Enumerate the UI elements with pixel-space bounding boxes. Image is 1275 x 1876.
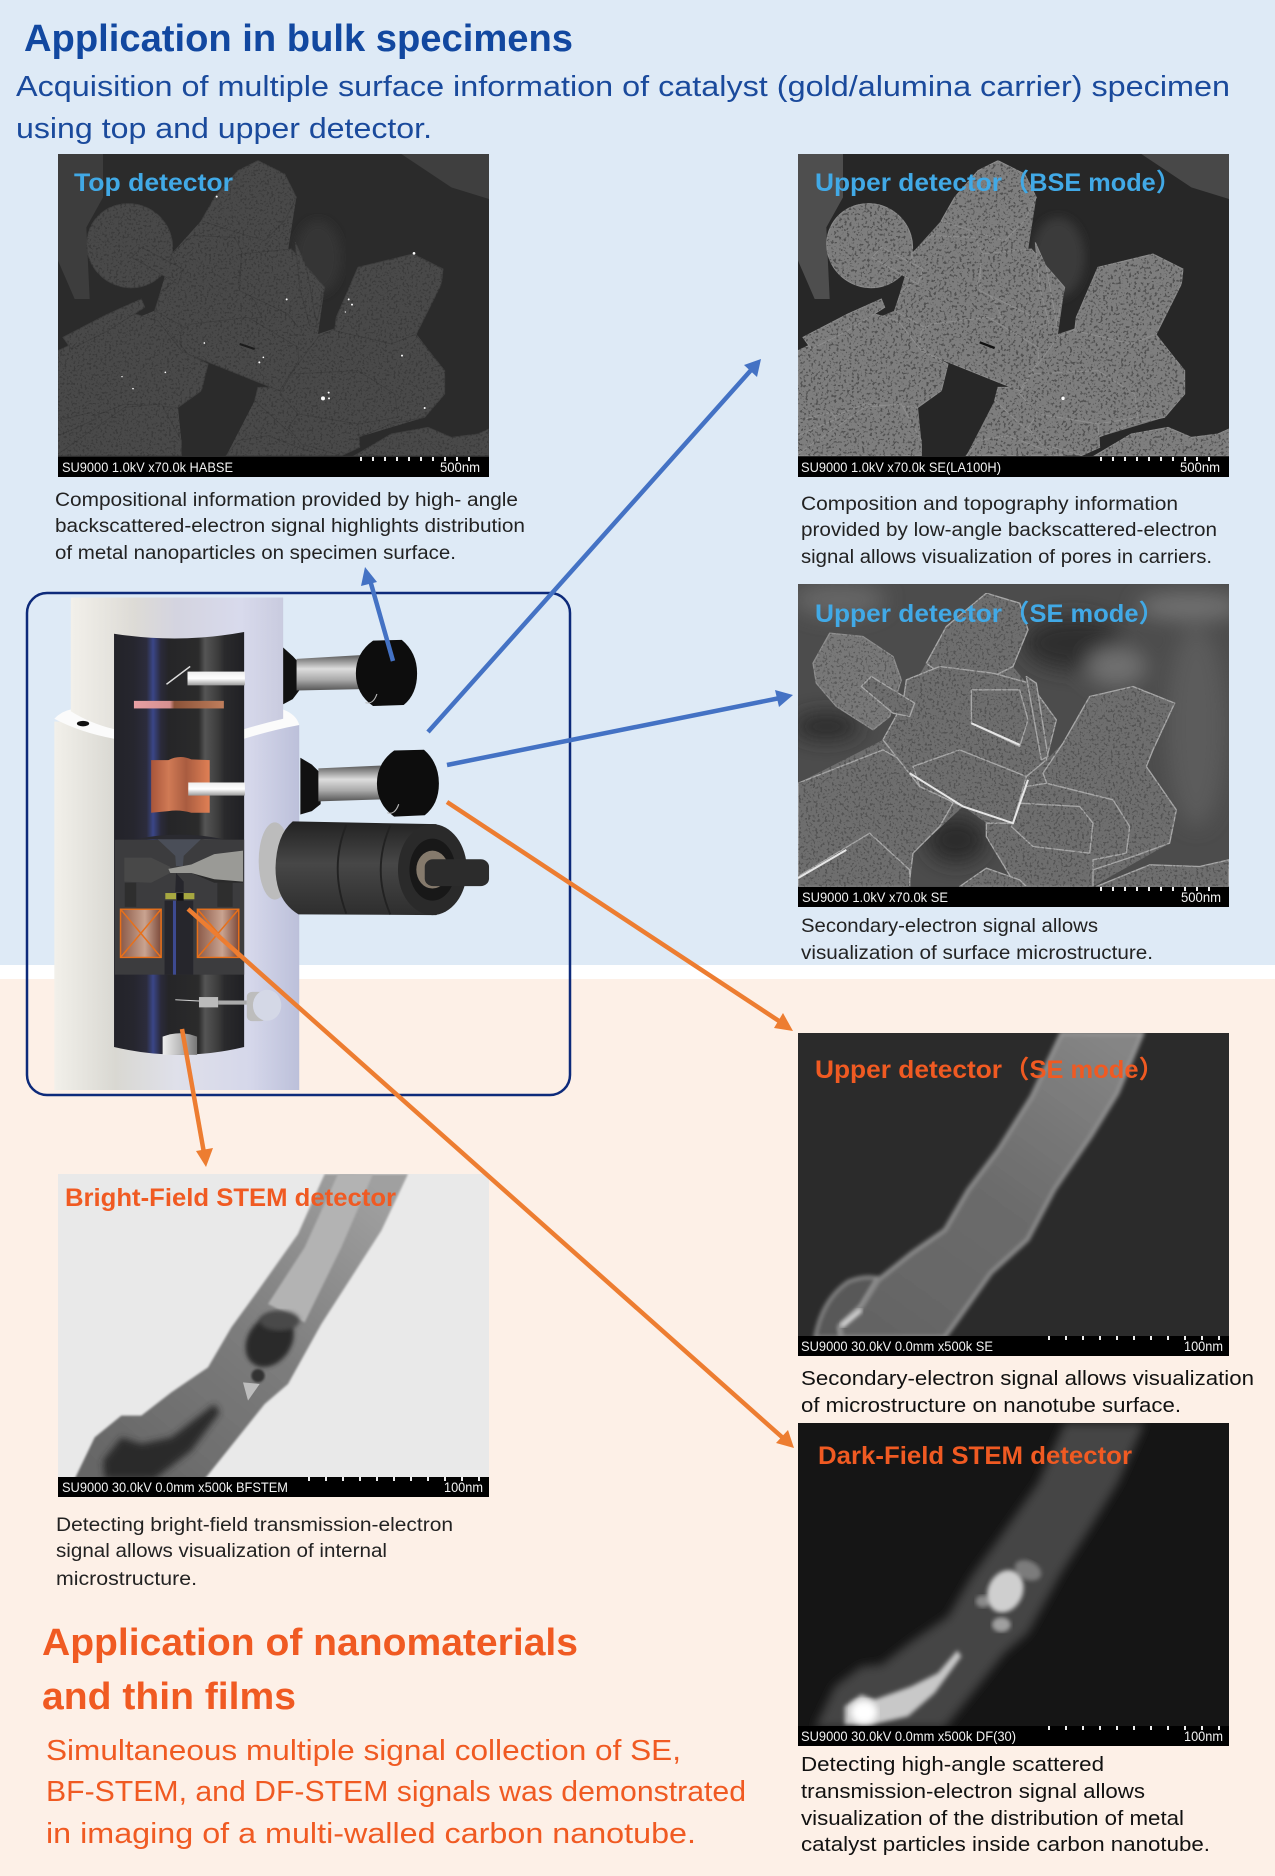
upper column body <box>71 598 283 729</box>
caption: dark-field STEM: transmission-electron signal allows <box>801 1781 1145 1803</box>
title: bulk specimens: Application in bulk specimens <box>24 18 573 60</box>
dark-field detector probe <box>175 990 281 1021</box>
caption: dark-field STEM <box>801 1754 1210 1856</box>
diagram: detector column cross-section <box>54 598 490 1090</box>
subtitle: nanomaterials <box>46 1735 746 1850</box>
caption: nanotube SE: of microstructure on nanotube surface. <box>801 1395 1181 1417</box>
top detector inside <box>166 666 245 685</box>
caption: upper detector SE mode <box>801 916 1153 964</box>
caption: upper detector BSE mode: provided by low-angle backscattered-electron <box>801 520 1217 541</box>
panel: upper detector BSE mode image: （BSE mode） <box>1004 169 1181 197</box>
panel: upper detector SE mode image: Upper detector <box>815 600 1002 628</box>
panel: upper detector BSE mode image <box>798 154 1229 477</box>
panel: upper detector SE mode image: （SE mode） <box>1004 600 1164 628</box>
subtitle: bulk specimens: using top and upper detector. <box>16 113 432 145</box>
subtitle: nanomaterials: Simultaneous multiple signal collection of SE, <box>46 1735 681 1767</box>
lower column body <box>54 722 299 1090</box>
title: nanomaterials and thin films: and thin films <box>42 1676 296 1718</box>
top detector external housing <box>283 640 417 706</box>
arrow: to upper detector BSE image <box>428 359 761 732</box>
title: nanomaterials and thin films: Application of nanomaterials <box>42 1622 578 1664</box>
caption: bright-field STEM: signal allows visualization of internal <box>56 1541 387 1562</box>
panel: upper detector BSE mode image: SU9000 1.0kV x70.0k SE(LA100H) <box>801 460 1001 475</box>
panel: upper detector BSE mode image: Upper detector <box>815 169 1002 197</box>
panel: nanotube upper detector SE image: Upper detector <box>815 1056 1002 1084</box>
subtitle: nanomaterials: BF-STEM, and DF-STEM signals was demonstrated <box>46 1776 746 1808</box>
side-entry specimen holder <box>259 821 489 915</box>
panel: nanotube upper detector SE image: 100nm <box>1184 1339 1223 1354</box>
arrow: to bright-field image <box>182 1029 213 1167</box>
caption: upper detector BSE mode: signal allows visualization of pores in carriers. <box>801 547 1212 568</box>
panel: upper detector SE mode image: 500nm <box>1181 890 1221 905</box>
subtitle: nanomaterials: in imaging of a multi-walled carbon nanotube. <box>46 1818 696 1850</box>
panel: bright-field STEM image: 100nm <box>444 1480 483 1495</box>
panel: upper detector SE mode image <box>793 583 1243 907</box>
caption: bright-field STEM: Detecting bright-field transmission-electron <box>56 1515 453 1536</box>
panel: dark-field STEM image: SU9000 30.0kV 0.0mm x500k DF(30) <box>801 1729 1016 1744</box>
bright-field detector <box>163 1033 197 1055</box>
caption: top detector <box>55 490 525 564</box>
caption: top detector: backscattered-electron signal highlights distribution <box>55 516 525 537</box>
panel: upper detector BSE mode image: 500nm <box>1180 460 1220 475</box>
arrow: to nanotube SE image <box>447 802 793 1031</box>
panel: nanotube upper detector SE image: （SE mode） <box>1004 1056 1164 1084</box>
subtitle: bulk specimens: Acquisition of multiple surface information of catalyst (gold/alumina carrier) specimen <box>16 71 1230 103</box>
panel: dark-field STEM image <box>798 1423 1229 1746</box>
caption: top detector: of metal nanoparticles on specimen surface. <box>55 543 456 564</box>
background: blue band <box>0 0 1275 965</box>
caption: nanotube SE <box>801 1368 1254 1417</box>
arrow: to top detector caption <box>361 567 393 661</box>
objective lens section <box>115 835 244 975</box>
panel: nanotube upper detector SE image: SU9000 30.0kV 0.0mm x500k SE <box>801 1339 993 1354</box>
caption: top detector: Compositional information provided by high- angle <box>55 490 518 511</box>
diagram frame <box>27 593 570 1095</box>
arrow: to upper detector SE image <box>447 690 793 765</box>
panel: dark-field STEM image: 100nm <box>1184 1729 1223 1744</box>
caption: nanotube SE: Secondary-electron signal allows visualization <box>801 1368 1254 1390</box>
caption: upper detector SE mode: Secondary-electron signal allows <box>801 916 1098 937</box>
background: peach band <box>0 979 1275 1876</box>
panel: bright-field STEM image: Bright-Field STEM detector <box>65 1184 396 1212</box>
panel: top detector image: 500nm <box>440 460 480 475</box>
upper detector inside <box>151 757 245 813</box>
cutaway interior <box>114 632 244 1055</box>
panel: upper detector SE mode image: SU9000 1.0kV x70.0k SE <box>802 890 948 905</box>
caption: dark-field STEM: visualization of the distribution of metal <box>801 1808 1184 1830</box>
panel: nanotube upper detector SE image <box>798 1033 1229 1356</box>
caption: dark-field STEM: Detecting high-angle scattered <box>801 1754 1104 1776</box>
panel: top detector image: SU9000 1.0kV x70.0k HABSE <box>62 460 233 475</box>
arrow: to dark-field image <box>188 909 794 1448</box>
caption: bright-field STEM: microstructure. <box>56 1569 197 1590</box>
caption: bright-field STEM <box>56 1515 453 1590</box>
title: nanomaterials and thin films <box>42 1622 578 1718</box>
panel: top detector image <box>58 154 489 477</box>
panel: top detector image: Top detector <box>74 169 233 197</box>
subtitle: bulk specimens <box>16 71 1230 145</box>
caption: dark-field STEM: catalyst particles inside carbon nanotube. <box>801 1834 1210 1856</box>
panel: bright-field STEM image <box>58 1174 489 1497</box>
upper detector external housing <box>300 750 439 817</box>
panel: dark-field STEM image: Dark-Field STEM detector <box>818 1442 1132 1470</box>
caption: upper detector SE mode: visualization of surface microstructure. <box>801 943 1153 964</box>
caption: upper detector BSE mode <box>801 494 1217 568</box>
caption: upper detector BSE mode: Composition and topography information <box>801 494 1178 515</box>
column shoulder <box>54 709 299 739</box>
aperture plate <box>134 701 224 708</box>
panel: bright-field STEM image: SU9000 30.0kV 0.0mm x500k BFSTEM <box>62 1480 288 1495</box>
